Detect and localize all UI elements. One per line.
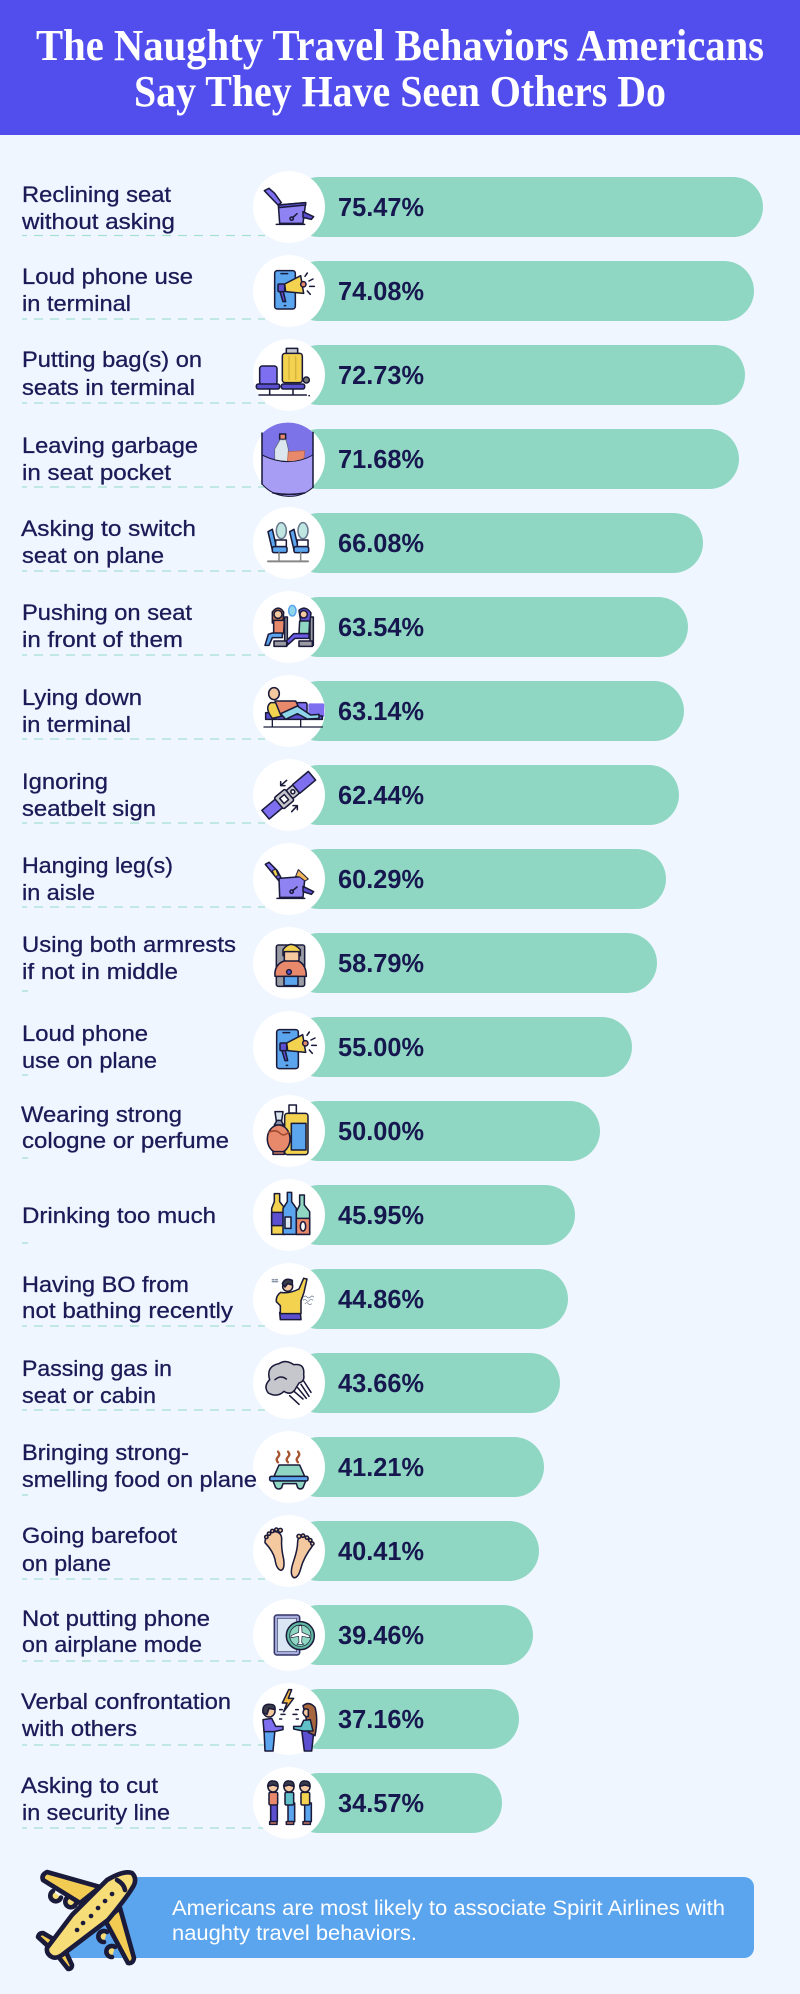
- icon: two people arguing: [263, 1690, 317, 1751]
- label: in terminal: [22, 712, 131, 737]
- value: 75.47%: [338, 192, 424, 222]
- value: 39.46%: [338, 1620, 424, 1650]
- value: 60.29%: [338, 864, 424, 894]
- row: Asking to cut in security line: [21, 1767, 502, 1839]
- row: Pushing on seat in front of them: [22, 591, 688, 663]
- label: Pushing on seat: [22, 600, 193, 625]
- value: 37.16%: [338, 1704, 424, 1734]
- callout text: naughty travel behaviors.: [172, 1922, 417, 1945]
- label: Lying down: [22, 685, 142, 710]
- label: Using both armrests: [22, 932, 236, 957]
- label: seat on plane: [22, 543, 164, 568]
- icon: people in a line: [268, 1781, 311, 1824]
- icon: cologne and perfume bottles: [267, 1105, 308, 1155]
- label: in seat pocket: [22, 460, 172, 485]
- icon: seatbelt: [261, 770, 317, 820]
- label: [22, 433, 198, 485]
- row: Ignoring seatbelt sign: [22, 759, 679, 831]
- row: Hanging leg(s) in aisle: [22, 843, 666, 915]
- label: Loud phone use: [22, 264, 193, 289]
- value: 45.95%: [338, 1200, 424, 1230]
- title: [36, 21, 764, 116]
- label: Not putting phone: [22, 1606, 210, 1631]
- label: [21, 182, 175, 234]
- label: not bathing recently: [22, 1298, 234, 1323]
- icon: leg hanging from seat: [265, 862, 314, 898]
- value: 72.73%: [338, 360, 424, 390]
- label: Putting bag(s) on: [22, 347, 202, 372]
- value: 71.68%: [338, 444, 424, 474]
- icon: phone with megaphone: [277, 1030, 316, 1069]
- header banner: [0, 0, 800, 135]
- label: Asking to switch: [21, 516, 196, 541]
- label: in aisle: [22, 880, 95, 905]
- value: 50.00%: [338, 1116, 424, 1146]
- icon: passengers pushing on seat: [265, 605, 313, 646]
- label: seatbelt sign: [22, 796, 156, 821]
- value: 34.57%: [338, 1788, 424, 1818]
- row: Reclining seat without asking: [21, 171, 763, 243]
- row: Using both armrests if not in middle: [22, 927, 657, 999]
- value: 40.41%: [338, 1536, 424, 1566]
- label: on airplane mode: [22, 1632, 202, 1657]
- value: 74.08%: [338, 276, 424, 306]
- icon: phone with airplane mode: [274, 1615, 314, 1655]
- label: Having BO from: [22, 1272, 189, 1297]
- label: Leaving garbage: [22, 433, 198, 458]
- row: Having BO from not bathing recently: [22, 1263, 568, 1335]
- callout: Spirit Airlines: [38, 1872, 754, 1969]
- value: 62.44%: [338, 780, 424, 810]
- icon: garbage in seat pocket: [262, 423, 313, 496]
- value: 63.54%: [338, 612, 424, 642]
- label: in front of them: [22, 627, 183, 652]
- label: Loud phone: [22, 1021, 148, 1046]
- label: [22, 1021, 157, 1073]
- value: 63.14%: [338, 696, 424, 726]
- label: Reclining seat: [22, 182, 172, 207]
- label: Drinking too much: [22, 1203, 216, 1228]
- row: Passing gas in seat or cabin: [22, 1347, 560, 1419]
- label: use on plane: [22, 1048, 157, 1073]
- icon: reclining seat: [264, 188, 314, 224]
- label: [22, 1272, 234, 1323]
- row: Leaving garbage in seat pocket: [22, 423, 739, 496]
- label: smelling food on plane: [22, 1467, 257, 1492]
- label: [21, 1102, 229, 1153]
- label: [22, 1440, 257, 1492]
- label: if not in middle: [22, 959, 178, 984]
- icon: airplane seats and windows: [268, 523, 309, 561]
- label: [21, 516, 196, 568]
- icon: alcohol bottles: [272, 1192, 310, 1234]
- callout text: [172, 1897, 725, 1945]
- icon: phone with megaphone: [275, 271, 314, 309]
- row: Going barefoot on plane: [22, 1515, 539, 1587]
- label: [22, 769, 156, 821]
- label: [22, 853, 173, 905]
- label: [22, 932, 236, 984]
- value: 44.86%: [338, 1284, 424, 1314]
- label: Asking to cut: [21, 1773, 159, 1798]
- row: Loud phone use on plane: [22, 1011, 632, 1083]
- value: 41.21%: [338, 1452, 424, 1482]
- label: seat or cabin: [22, 1383, 156, 1408]
- label: [21, 1689, 231, 1741]
- value: 58.79%: [338, 948, 424, 978]
- label: cologne or perfume: [22, 1128, 229, 1153]
- icon: person lying on terminal seats: [264, 688, 324, 727]
- label: without asking: [21, 209, 175, 234]
- icon: bag on terminal seats: [256, 348, 309, 396]
- icon: smelly takeout food: [270, 1452, 308, 1489]
- icon: bare feet: [265, 1528, 314, 1578]
- row: Lying down in terminal: [22, 675, 684, 747]
- label: [22, 1523, 178, 1576]
- icon: passenger on both armrests: [275, 944, 306, 986]
- row: Loud phone use in terminal: [22, 255, 754, 327]
- label: [22, 600, 193, 652]
- label: Going barefoot: [22, 1523, 178, 1548]
- label: [22, 347, 202, 400]
- row: Putting bag(s) on seats in terminal: [22, 339, 745, 411]
- label: Wearing strong: [21, 1102, 182, 1127]
- row: Asking to switch seat on plane: [21, 507, 703, 579]
- label: [21, 1773, 170, 1825]
- icon: airplane: [38, 1872, 135, 1969]
- title: Say They Have Seen Others Do: [134, 67, 666, 116]
- label: Hanging leg(s): [22, 853, 173, 878]
- label: [22, 1356, 172, 1408]
- label: Ignoring: [22, 769, 108, 794]
- label: with others: [21, 1716, 137, 1741]
- label: seats in terminal: [22, 375, 195, 400]
- value: 43.66%: [338, 1368, 424, 1398]
- label: in terminal: [22, 291, 131, 316]
- value: 66.08%: [338, 528, 424, 558]
- row: Verbal confrontation with others: [21, 1683, 519, 1755]
- label: [22, 685, 142, 737]
- row: Bringing strong-smelling food on plane: [22, 1431, 544, 1503]
- label: on plane: [22, 1551, 111, 1576]
- label: Bringing strong-: [22, 1440, 189, 1465]
- label: Passing gas in: [22, 1356, 172, 1381]
- label: in security line: [22, 1800, 170, 1825]
- value: 55.00%: [338, 1032, 424, 1062]
- label: [22, 264, 193, 316]
- icon: man with body odor: [272, 1278, 314, 1320]
- icon: gas cloud: [266, 1362, 311, 1404]
- label: Verbal confrontation: [21, 1689, 231, 1714]
- row: Drinking too much: [22, 1179, 575, 1251]
- row: Wearing strong cologne or perfume: [21, 1095, 600, 1167]
- row: Not putting phone on airplane mode: [22, 1599, 533, 1671]
- callout text: Americans are most likely to associate Spirit Airlines with: [172, 1897, 725, 1920]
- label: [22, 1606, 210, 1657]
